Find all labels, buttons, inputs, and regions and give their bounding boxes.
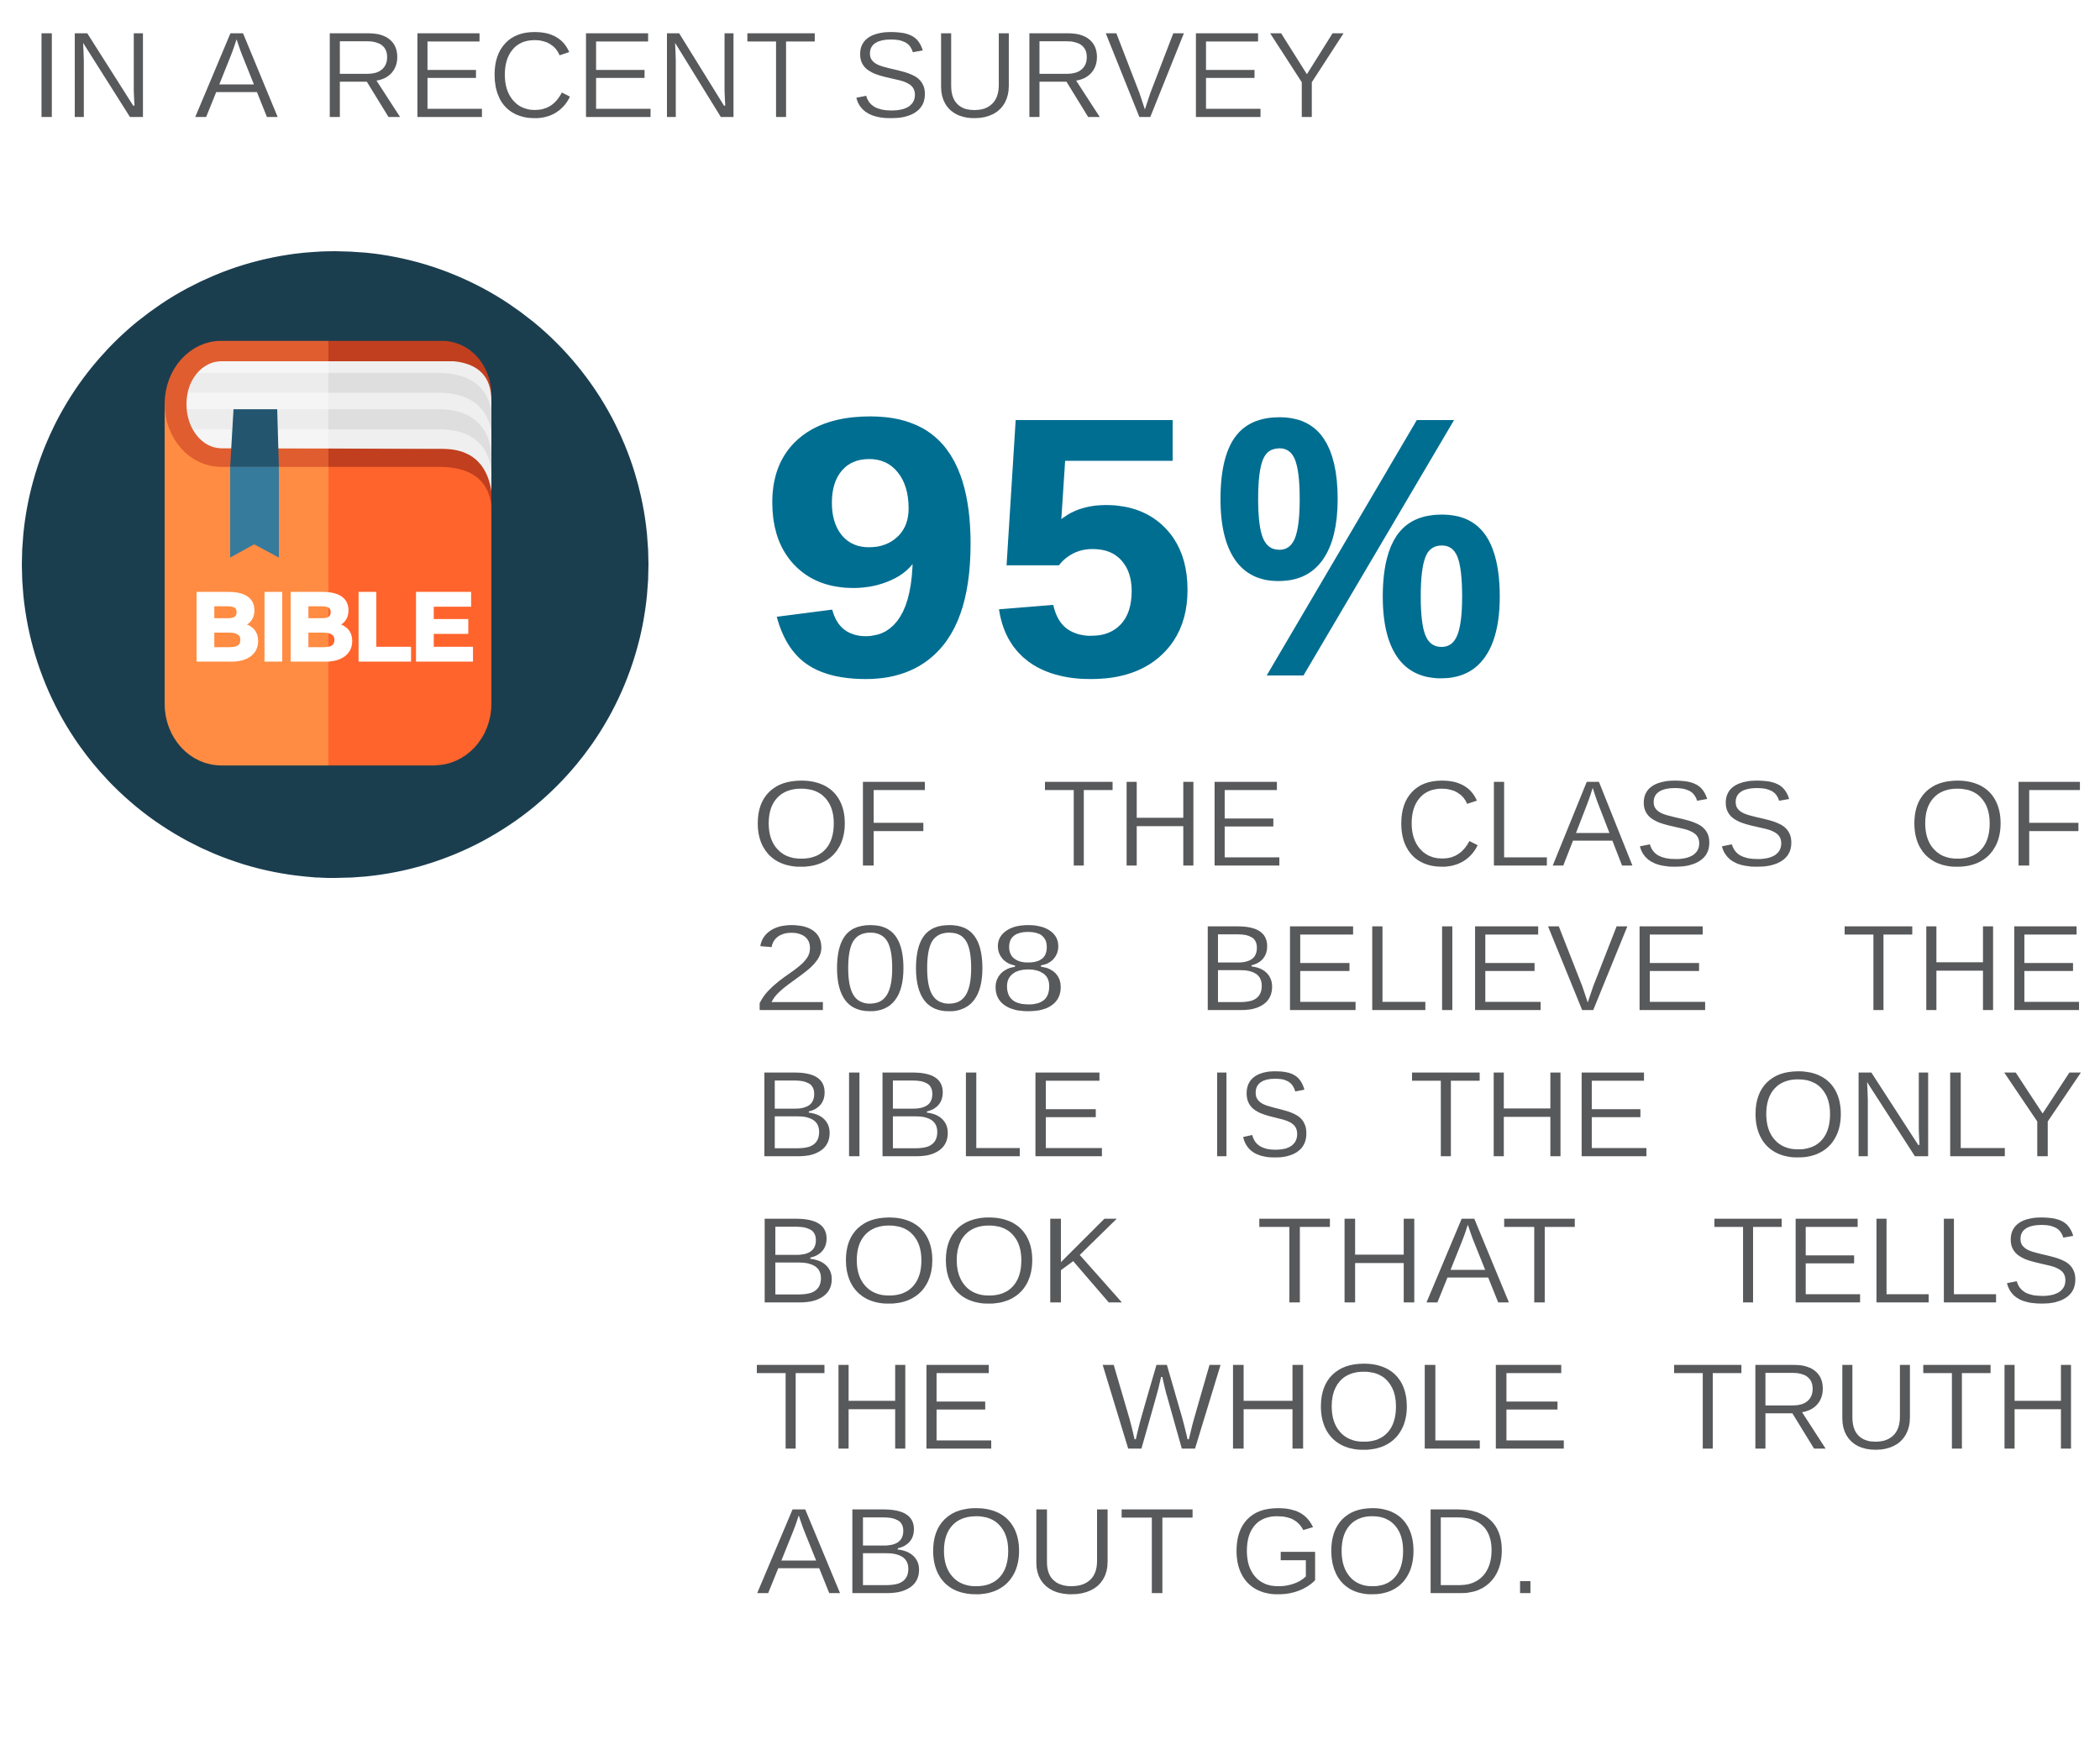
title: A [194, 7, 279, 145]
description text: THE [1042, 755, 1285, 893]
book cover top [165, 341, 491, 509]
description text: GOD. [1230, 1483, 1542, 1621]
title [29, 7, 1347, 145]
description text: WHOLE [1101, 1338, 1570, 1476]
book pages [182, 361, 491, 491]
book label: BIBLE [192, 574, 475, 680]
description text: BIBLE [753, 1046, 1108, 1184]
description text: BELIEVE [1197, 900, 1711, 1038]
description text: THE [753, 1338, 997, 1476]
description text: TRUTH [1671, 1338, 2082, 1476]
title: IN [29, 7, 154, 145]
description text: IS [1206, 1046, 1312, 1184]
statistic: 95% [760, 343, 1507, 752]
description text: THE [1409, 1046, 1652, 1184]
description text: TELLS [1711, 1192, 2082, 1330]
book illustration [165, 341, 491, 765]
title: RECENT [319, 7, 818, 145]
description text [751, 755, 2086, 1621]
description text: BOOK [753, 1192, 1125, 1330]
ribbon bookmark [230, 409, 279, 558]
description text: ONLY [1749, 1046, 2085, 1184]
icon: bible in circle [22, 251, 648, 878]
description text: THE [1841, 900, 2085, 1038]
statistic: 95%: % [1214, 343, 1507, 752]
book cover front [165, 404, 491, 765]
title: SURVEY [850, 7, 1347, 145]
description text: THAT [1256, 1192, 1578, 1330]
icon background circle [22, 251, 648, 878]
description text: OF [1908, 755, 2086, 893]
statistic: 95%: 9 [760, 343, 984, 752]
description text: 2008 [752, 900, 1068, 1038]
statistic: 95%: 5 [990, 343, 1196, 752]
description text: OF [751, 755, 931, 893]
description text: ABOUT [756, 1483, 1196, 1621]
description text: CLASS [1394, 755, 1798, 893]
